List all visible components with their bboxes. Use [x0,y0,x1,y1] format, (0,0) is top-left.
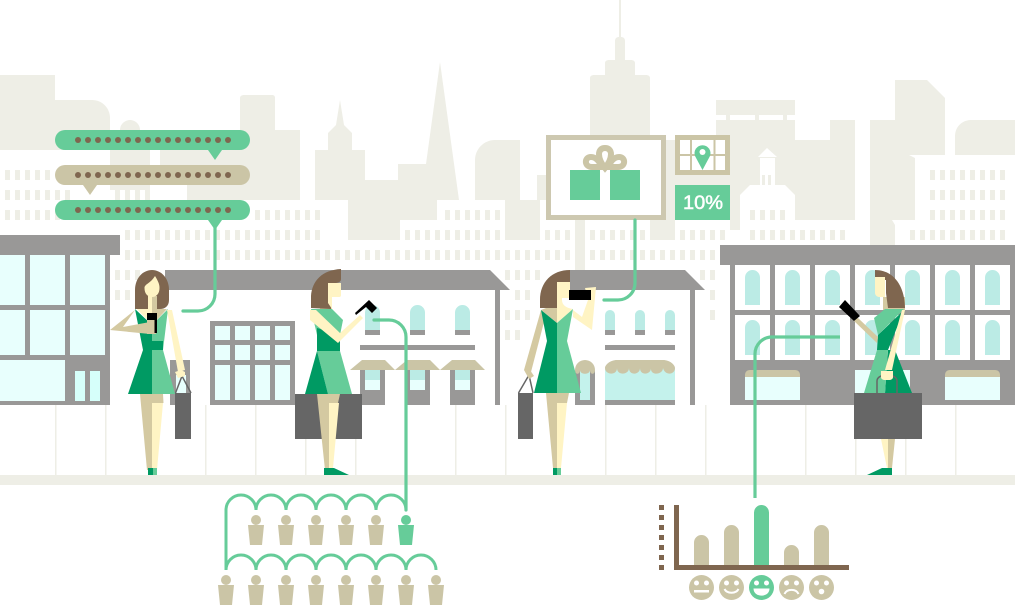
shopper 4: woman with phone and large bag [839,270,922,475]
building: left glass shop [0,235,120,405]
connector: phone to ratings chart [755,337,840,498]
icon: gift box [570,148,640,200]
icon: smiling face [719,575,744,600]
shopper 3: woman taking a photo [518,270,596,475]
building: middle store [165,270,510,405]
billboard: gift offer [548,138,664,218]
chart axis ticks [659,505,664,570]
icon: surprised face [809,575,834,600]
icon: neutral face [689,575,714,600]
chart bars [694,505,829,565]
building: cafe store [570,270,705,405]
city skyline silhouette [0,0,1015,270]
icon: laughing face [749,575,774,600]
discount badge: 10% [683,193,723,214]
icon: map with location pin [675,135,730,175]
connector: phone to people network [374,320,406,510]
shopper 2: woman with phone and large bag [295,269,377,475]
speech bubble: beige middle [55,165,250,195]
connector: billboard to shopper 3 [604,220,635,300]
discount badge [675,185,730,220]
shopper 1: woman with phone and small bag [110,270,191,475]
pavement and kerb [0,405,1015,485]
speech bubble: green top [55,130,250,160]
network arcs [226,495,436,570]
satisfaction bar chart [659,505,849,600]
chart axes [674,505,849,570]
white classical building with cupola [740,148,795,240]
bottom row of people [218,575,444,605]
top row of people [248,515,384,545]
people network diagram [218,495,444,605]
icon: sad face [779,575,804,600]
highlighted person [398,515,414,545]
speech bubble: green bottom [55,200,250,230]
building: right arcade store [720,245,1015,405]
connector: speech bubble to shopper 1 [183,225,215,311]
background building windows [0,170,1010,340]
